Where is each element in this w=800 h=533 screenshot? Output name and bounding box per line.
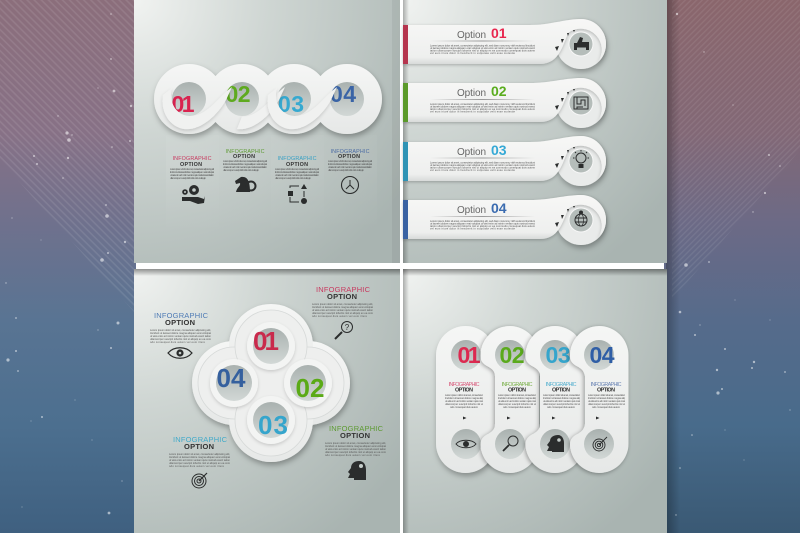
option 1 text [170,156,215,180]
ribbon option 03 [403,136,606,186]
icon: magnifier [503,436,518,451]
option 1 text: INFOGRAPHIC [172,156,212,162]
callout bottom left: OPTION [184,442,214,451]
ribbon option 02: Lorem ipsum dolor sit amet, consectetur adipiscing elit, sed diam nonummy nibh euismod tincidunt [430,102,535,106]
ribbon option 04: tation ullamcorper suscipit lobortis nisl ut aliquip ex ea commodo consequat duis autem [430,224,535,228]
ribbon option 01: Option [457,30,486,41]
callout bottom left: ut wisi enim ad minim veniam quis nostrud exerci tation [169,458,231,462]
ribbon option 01: Lorem ipsum dolor sit amet, consectetur adipiscing elit, sed diam nonummy nibh euismod tincidunt [430,44,535,48]
option 4 text [328,149,373,172]
option 3 text: Lorem ipsum dolor sit amet, consectetur adipiscing elit [275,167,319,171]
callout top left: OPTION [165,318,195,327]
capsule 1 [436,326,495,473]
background: left strip [0,0,136,533]
callout bottom right: odo consequat duis autem vel eum iriure [325,453,381,457]
icon: eye [168,348,192,358]
option 4 text: ut wisi enim ad minim veniam quis nostrud exerci tation [328,165,373,169]
ribbon option 01: 01 [491,25,507,41]
callout bottom right: ullamcorper suscipit lobortis nisl ut aliquip ex ea com [325,450,386,454]
option 2 text: OPTION [233,154,255,160]
callout top left: INFOGRAPHIC [154,311,209,320]
number 03: 03 [278,91,304,117]
number 01: 01 [253,326,279,356]
option 4 text: Lorem ipsum dolor sit amet, consectetur adipiscing elit [328,159,372,163]
callout top right: tincidunt ut laoreet dolore magna aliquam erat volutpat [312,305,373,309]
capsule 2: ullamcorper suscipit lobortis nisl ut [498,402,536,406]
ribbon option 02: tation ullamcorper suscipit lobortis nisl ut aliquip ex ea commodo consequat duis autem [430,107,535,111]
callout top left: odo consequat duis autem vel eum iriure [150,340,206,344]
ribbon option 03: Lorem ipsum dolor sit amet, consectetur adipiscing elit, sed diam nonummy nibh euismod tincidunt [430,160,535,164]
capsule 3: odo consequat duis autem [547,405,575,409]
ribbon option 02: Option [457,88,486,99]
capsule 1: Lorem ipsum dolor sit amet, consectetur [445,393,483,397]
icon: maze [574,97,588,109]
option 2 text: ullamcorper suscipit lobortis nisl ut aliquip [223,168,260,172]
callout bottom left: Lorem ipsum dolor sit amet, consectetur adipiscing elit, [169,452,230,456]
callout top right: ut wisi enim ad minim veniam quis nostrud exerci tation [312,308,374,312]
option 3 text: tincidunt ut laoreet dolore magna aliquam erat volutpat [275,170,319,174]
option 1 text: ullamcorper suscipit lobortis nisl ut aliquip [170,176,207,180]
swoosh band 3 [267,87,337,129]
capsule 4: ullamcorper suscipit lobortis nisl ut [588,402,625,406]
capsule 2: Lorem ipsum dolor sit amet, consectetur [498,393,536,397]
option 1 text: Lorem ipsum dolor sit amet, consectetur adipiscing elit [170,167,214,171]
option 4 text: INFOGRAPHIC [330,149,370,155]
text column backgrounds [166,135,377,235]
icon: head with gear [547,435,564,452]
capsule 4: ut wisi enim ad minim veniam quis nost [588,399,625,403]
panel: ribbon options infographic [403,0,667,263]
callout bottom right: tincidunt ut laoreet dolore magna aliquam erat volutpat [325,444,386,448]
ribbon option 01 [403,19,606,69]
icon: target [192,473,207,488]
icon: magnifier with question mark: ? [345,323,350,332]
option 3 text: OPTION [286,162,308,168]
swoosh band 2 [237,87,285,129]
ribbon option 02: vel eum iriure dolor in hendrerit in vulputate velit esse molestie [430,110,516,114]
option 4 text: ullamcorper suscipit lobortis nisl ut aliquip [328,168,365,172]
background: right strip [664,0,800,533]
callout bottom left: ullamcorper suscipit lobortis nisl ut aliquip ex ea com [169,461,230,465]
ribbon option 03: vel eum iriure dolor in hendrerit in vulputate velit esse molestie [430,168,516,172]
option 2 text: Lorem ipsum dolor sit amet, consectetur adipiscing elit [223,159,267,163]
option 3 text [275,156,320,180]
callout top right: odo consequat duis autem vel eum iriure [312,314,368,318]
capsule 1: 01 [458,342,481,368]
callout bottom right: ut wisi enim ad minim veniam quis nostrud exerci tation [325,447,387,451]
icon: magnifier with question mark [335,322,352,339]
callout top left: Lorem ipsum dolor sit amet, consectetur adipiscing elit, [150,328,211,332]
callout top left [150,311,212,344]
ribbon option 03: tation ullamcorper suscipit lobortis nisl ut aliquip ex ea commodo consequat duis autem [430,166,535,170]
capsule 3: OPTION [552,388,570,394]
ribbon option 01: tation ullamcorper suscipit lobortis nisl ut aliquip ex ea commodo consequat duis autem [430,48,535,52]
capsule 4: 04 [590,342,615,368]
capsule 1: odo consequat duis autem [450,405,478,409]
number 02: 02 [226,81,250,107]
capsule 2: tincidunt ut laoreet dolore magna aliq [498,396,537,400]
number 04: 04 [216,363,246,393]
panel: four-petal circles infographic [134,269,400,533]
icon: flow chart [288,184,307,204]
ribbon option 02: ut laoreet dolore magna aliquam erat volutpat ut wisi enim ad minim veniam quis nostrud exerci [430,104,535,108]
capsule 3: ut wisi enim ad minim veniam quis nost [543,399,580,403]
callout bottom right: OPTION [340,431,370,440]
capsule 4 [570,326,628,473]
callout top right [312,285,374,318]
option 4 text: OPTION [338,154,360,160]
callout top right: OPTION [327,292,357,301]
icon: light bulb [573,150,589,168]
icon: globe with pin [575,210,587,226]
callout bottom left: odo consequat duis autem vel eum iriure [169,464,225,468]
capsule 3: Lorem ipsum dolor sit amet, consectetur [543,393,580,397]
ribbon option 04: Option [457,205,486,216]
ribbon option 01: vel eum iriure dolor in hendrerit in vulputate velit esse molestie [430,51,516,55]
number 01: 01 [172,91,195,117]
callout top left: tincidunt ut laoreet dolore magna aliquam erat volutpat [150,331,211,335]
callout bottom right [325,424,387,457]
callout bottom left: tincidunt ut laoreet dolore magna aliquam erat volutpat [169,455,230,459]
capsule 2: ut wisi enim ad minim veniam quis nost [498,399,536,403]
icon: eye [456,440,476,448]
capsule 4: INFOGRAPHIC [590,382,622,388]
capsule 2: OPTION [508,388,526,394]
capsule 1: tincidunt ut laoreet dolore magna aliq [445,396,484,400]
capsule 4: Lorem ipsum dolor sit amet, consectetur [588,393,625,397]
ribbon option 01: ut laoreet dolore magna aliquam erat volutpat ut wisi enim ad minim veniam quis nostrud exerci [430,46,535,50]
ribbon option 04: 04 [491,200,507,216]
icon: target [593,437,607,451]
option 4 text: tincidunt ut laoreet dolore magna aliquam erat volutpat [328,162,372,166]
panel: vertical capsules infographic [403,269,667,533]
callout top left: ullamcorper suscipit lobortis nisl ut aliquip ex ea com [150,337,211,341]
swoosh band 1 [162,87,232,129]
capsule 2 [480,326,539,473]
option 2 text [223,149,268,172]
capsule 3: tincidunt ut laoreet dolore magna aliq [543,396,581,400]
option 3 text: ullamcorper suscipit lobortis nisl ut aliquip [275,176,312,180]
option 2 text: INFOGRAPHIC [226,149,265,155]
capsule 1: OPTION [455,388,473,394]
number 02: 02 [296,373,324,403]
ribbon option 04: vel eum iriure dolor in hendrerit in vulputate velit esse molestie [430,226,516,230]
capsule 3 [525,326,584,473]
petal cluster [192,304,350,462]
panel: interlocking rings infographic [134,0,400,263]
callout bottom right: INFOGRAPHIC [329,424,384,433]
capsule 4: odo consequat duis autem [592,405,620,409]
capsule 3: ullamcorper suscipit lobortis nisl ut [543,402,580,406]
capsule 1: ullamcorper suscipit lobortis nisl ut [445,402,483,406]
callout top right: Lorem ipsum dolor sit amet, consectetur adipiscing elit, [312,302,373,306]
ribbon option 03: 03 [491,142,507,158]
capsule 1: ut wisi enim ad minim veniam quis nost [445,399,483,403]
capsule 1: INFOGRAPHIC [448,382,480,388]
option 3 text: ut wisi enim ad minim veniam quis nostrud exerci tation [275,173,320,177]
option 1 text: tincidunt ut laoreet dolore magna aliquam erat volutpat [170,170,214,174]
ribbon option 02 [403,78,606,128]
option 2 text: tincidunt ut laoreet dolore magna aliquam erat volutpat [223,162,267,166]
callout top right: INFOGRAPHIC [316,285,371,294]
callout top right: ullamcorper suscipit lobortis nisl ut aliquip ex ea com [312,311,373,315]
capsule 4: tincidunt ut laoreet dolore magna aliq [588,396,626,400]
option 1 text: OPTION [180,162,202,168]
callout bottom right: Lorem ipsum dolor sit amet, consectetur adipiscing elit, [325,441,386,445]
number 03: 03 [258,410,288,440]
ribbon option 03: ut laoreet dolore magna aliquam erat volutpat ut wisi enim ad minim veniam quis nostrud exerci [430,163,535,167]
capsule 2: odo consequat duis autem [503,405,531,409]
icon: thumb up [574,37,589,50]
ribbon option 04: Lorem ipsum dolor sit amet, consectetur adipiscing elit, sed diam nonummy nibh euismod tincidunt [430,219,535,223]
callout top left: ut wisi enim ad minim veniam quis nostrud exerci tation [150,334,212,338]
capsule 4: OPTION [597,388,615,394]
capsule 3: 03 [546,342,570,368]
capsule 2: INFOGRAPHIC [502,382,533,388]
capsule 3: INFOGRAPHIC [546,382,577,388]
option 3 text: INFOGRAPHIC [278,156,317,162]
ribbon option 04: ut laoreet dolore magna aliquam erat volutpat ut wisi enim ad minim veniam quis nostrud exerci [430,222,535,226]
icon: head with gear [348,461,366,480]
icon: gears on hand [182,185,205,204]
capsule 2: 02 [500,342,524,368]
icon: chess knight and gear [235,177,256,192]
number 04: 04 [330,81,356,107]
ribbon option 04 [403,195,606,245]
chain of four rings [154,64,382,134]
callout bottom left [169,435,231,468]
option 1 text: ut wisi enim ad minim veniam quis nostrud exerci tation [170,173,215,177]
ribbon option 02: 02 [491,83,507,99]
option 2 text: ut wisi enim ad minim veniam quis nostrud exerci tation [223,165,268,169]
callout bottom left: INFOGRAPHIC [173,435,228,444]
icon: clock [342,176,358,194]
ribbon option 03: Option [457,147,486,158]
